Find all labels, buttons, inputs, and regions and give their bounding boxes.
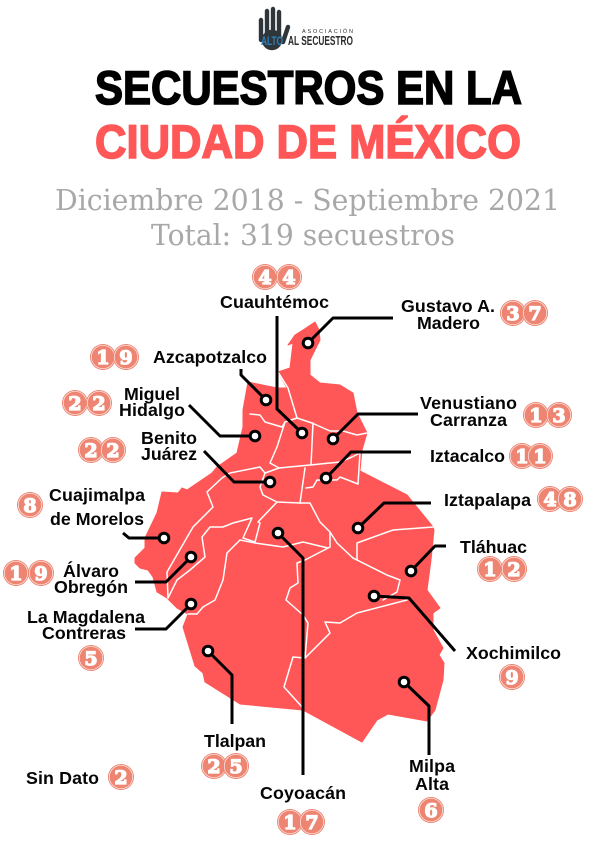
label: Gustavo A. Madero: Madero [417, 313, 480, 333]
label: Milpa Alta: Alta [415, 774, 449, 794]
title line 1: SECUESTROS EN LA [95, 62, 522, 115]
label: Gustavo A. Madero: Gustavo A. [401, 296, 495, 316]
title [95, 62, 522, 169]
callout: Azcapotzalco [241, 369, 271, 405]
badge: 44 [252, 264, 302, 290]
callout: Iztacalco [321, 452, 411, 483]
badge: 19 Azcapotzalco [90, 344, 139, 370]
callout: Milpa Alta [399, 677, 429, 755]
label: Sin Dato: Sin Dato [26, 768, 99, 788]
callout: Cuauhtémoc [277, 316, 307, 438]
badge: 22 Miguel Hidalgo: 2 [68, 393, 82, 415]
label: Benito Juárez [141, 428, 197, 464]
map: Ciudad de México [135, 322, 444, 742]
badge: 22 Miguel Hidalgo: 2 [92, 393, 106, 415]
badge: 37 [500, 300, 548, 326]
badge: 17: 1 [283, 812, 297, 834]
callout: Benito Juárez [204, 451, 275, 487]
badge: 13 [523, 402, 572, 428]
icon: hand [261, 9, 288, 48]
label: Álvaro Obregón [54, 560, 128, 597]
callout: Coyoacán [273, 528, 303, 775]
label: Coyoacán: Coyoacán [260, 783, 346, 803]
badge: 22 Benito Juárez [78, 437, 126, 463]
callout: Cuajimalpa [123, 533, 169, 543]
label: La Magdalena Contreras: Contreras [42, 623, 126, 643]
label: Venustiano Carranza: Venustiano [420, 393, 517, 413]
label: Iztacalco: Iztacalco [430, 446, 505, 466]
label: Milpa Alta [409, 756, 455, 794]
label: Cuajimalpa de Morelos: Cuajimalpa [49, 485, 145, 505]
subtitle [55, 183, 560, 252]
label: Cuajimalpa de Morelos: de Morelos [50, 509, 144, 529]
badge: 48: 4 [543, 489, 557, 511]
badge: 19 Azcapotzalco: 9 [119, 347, 133, 369]
label: Milpa Alta: Milpa [409, 756, 455, 776]
callout: Gustavo A. Madero [303, 318, 393, 348]
logo: Asociación Alto al Secuestro [261, 9, 353, 48]
badge: 19 Álvaro Obregón: 9 [34, 563, 48, 585]
badge: 19 Álvaro Obregón: 1 [9, 563, 23, 585]
label: Tláhuac: Tláhuac [460, 537, 527, 557]
badge: 25 [201, 753, 249, 779]
badge: 2: 2 [114, 767, 128, 789]
callout: Venustiano Carranza [328, 414, 418, 444]
badge: 9 [499, 664, 525, 690]
label: Xochimilco: Xochimilco [466, 643, 561, 663]
badge: 12: 1 [483, 559, 497, 581]
label: Cuauhtémoc: Cuauhtémoc [220, 292, 329, 312]
badge: 17: 7 [305, 812, 319, 834]
label: Venustiano Carranza [420, 393, 517, 430]
badge: 13: 1 [529, 405, 543, 427]
logo word: AL SECUESTRO: AL SECUESTRO [288, 33, 353, 48]
label: Venustiano Carranza: Carranza [430, 410, 507, 430]
label: Gustavo A. Madero [401, 296, 495, 333]
label: Tlalpan: Tlalpan [204, 731, 266, 751]
badge: 11: 1 [533, 446, 547, 468]
callout: Tlalpan [203, 646, 232, 724]
municipality borders [167, 372, 433, 708]
label: Miguel Hidalgo: Hidalgo [119, 400, 185, 420]
label: Álvaro Obregón: Obregón [54, 577, 128, 597]
callout lines and markers [123, 316, 455, 775]
logo word: ASOCIACIÓN: ASOCIACIÓN [302, 28, 353, 35]
badge: 11: 1 [515, 446, 529, 468]
badge: 9: 9 [505, 667, 519, 689]
badge: 37: 7 [528, 303, 542, 325]
label: Benito Juárez: Juárez [141, 444, 197, 464]
label: Iztapalapa: Iztapalapa [444, 490, 531, 510]
badge: 25: 2 [207, 756, 221, 778]
label: Benito Juárez: Benito [141, 428, 197, 448]
badge: 44: 4 [282, 267, 296, 289]
date range: Diciembre 2018 - Septiembre 2021 [55, 183, 560, 217]
callout: Xochimilco [369, 591, 455, 651]
badge: 8 [17, 492, 43, 518]
callout: Álvaro Obregón [135, 552, 196, 582]
label: La Magdalena Contreras [27, 607, 145, 643]
callout: La Magdalena Contreras [135, 599, 196, 629]
label: Azcapotzalco: Azcapotzalco [153, 347, 267, 367]
badge: 12 [477, 556, 527, 582]
badge: 12: 2 [507, 559, 521, 581]
callout: Iztapalapa [353, 503, 431, 533]
badge: 22 Benito Juárez: 2 [106, 440, 120, 462]
badge: 44: 4 [258, 267, 272, 289]
badge: 25: 5 [229, 756, 243, 778]
badge: 37: 3 [506, 303, 520, 325]
badge: 5 [78, 645, 104, 671]
label: Miguel Hidalgo [119, 384, 185, 420]
title line 2: CIUDAD DE MÉXICO [95, 115, 521, 169]
label: La Magdalena Contreras: La Magdalena [27, 607, 145, 627]
total: Total: 319 secuestros [151, 218, 455, 252]
label: Miguel Hidalgo: Miguel [124, 384, 180, 404]
callout: Tláhuac [406, 546, 446, 576]
badge: 5: 5 [84, 648, 98, 670]
logo word: ALTO: ALTO [261, 34, 283, 48]
badge: 17 [277, 809, 325, 835]
badge: 6 [418, 797, 444, 823]
badge: 19 Azcapotzalco: 1 [96, 347, 110, 369]
badge: 22 Miguel Hidalgo [62, 390, 112, 416]
badge: 11 [509, 443, 553, 469]
label: Cuajimalpa de Morelos [49, 485, 145, 529]
badge: 19 Álvaro Obregón [3, 560, 54, 586]
badge: 6: 6 [424, 800, 438, 822]
badge: 48 [537, 486, 583, 512]
badge: 48: 8 [563, 489, 577, 511]
map silhouette [135, 322, 444, 742]
badge: 22 Benito Juárez: 2 [84, 440, 98, 462]
callout: Miguel Hidalgo [189, 405, 260, 441]
badge: 13: 3 [552, 405, 566, 427]
badge: 2 [108, 764, 134, 790]
label: Álvaro Obregón: Álvaro [63, 560, 119, 581]
badge: 8: 8 [23, 495, 37, 517]
